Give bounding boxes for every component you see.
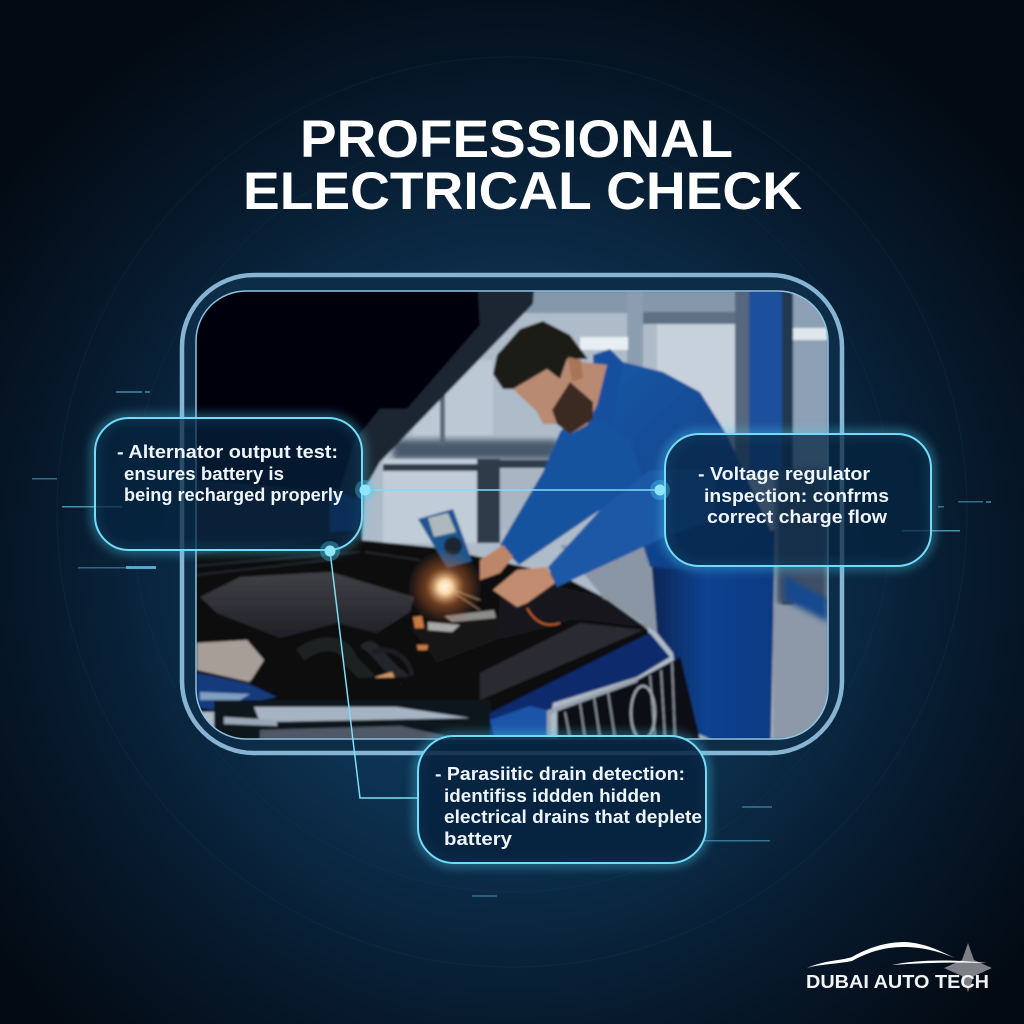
title: PROFESSIONAL <box>300 110 733 169</box>
multimeter <box>418 509 472 568</box>
callout: alternator output test: being recharged properly <box>124 485 343 505</box>
open hood <box>196 291 534 560</box>
workshop background <box>196 291 830 739</box>
callout: alternator output test <box>95 418 362 550</box>
frame <box>182 275 842 753</box>
connector dots <box>320 480 670 561</box>
callout: alternator output test: - Alternator output test: <box>117 442 338 462</box>
callout: alternator output test: ensures battery is <box>124 464 284 484</box>
callout: parasitic drain detection: battery <box>444 829 512 849</box>
car front trim <box>197 623 700 740</box>
title <box>243 110 802 221</box>
logo: Dubai Auto Tech: DUBAI AUTO TECH <box>806 971 989 992</box>
callout: parasitic drain detection: - Parasiitic drain detection: <box>435 764 685 784</box>
decorative light streaks <box>32 391 991 897</box>
mechanic <box>480 321 775 739</box>
callout: parasitic drain detection: identifiss iddden hidden <box>444 786 661 806</box>
callout: voltage regulator inspection <box>665 434 931 566</box>
callout: voltage regulator inspection: inspection: confrms <box>704 486 889 506</box>
callout: voltage regulator inspection: correct charge flow <box>707 507 888 527</box>
engine bay <box>196 538 655 712</box>
frame band fill <box>182 275 842 753</box>
photo: mechanic testing car electrics <box>196 291 830 740</box>
connector lines <box>330 490 664 798</box>
callout: voltage regulator inspection: - Voltage regulator <box>698 464 870 484</box>
spark <box>407 549 483 625</box>
callout: parasitic drain detection <box>418 736 706 863</box>
logo: Dubai Auto Tech <box>806 942 992 992</box>
callout: parasitic drain detection: electrical drains that deplete <box>444 807 702 827</box>
title: ELECTRICAL CHECK <box>243 162 802 221</box>
